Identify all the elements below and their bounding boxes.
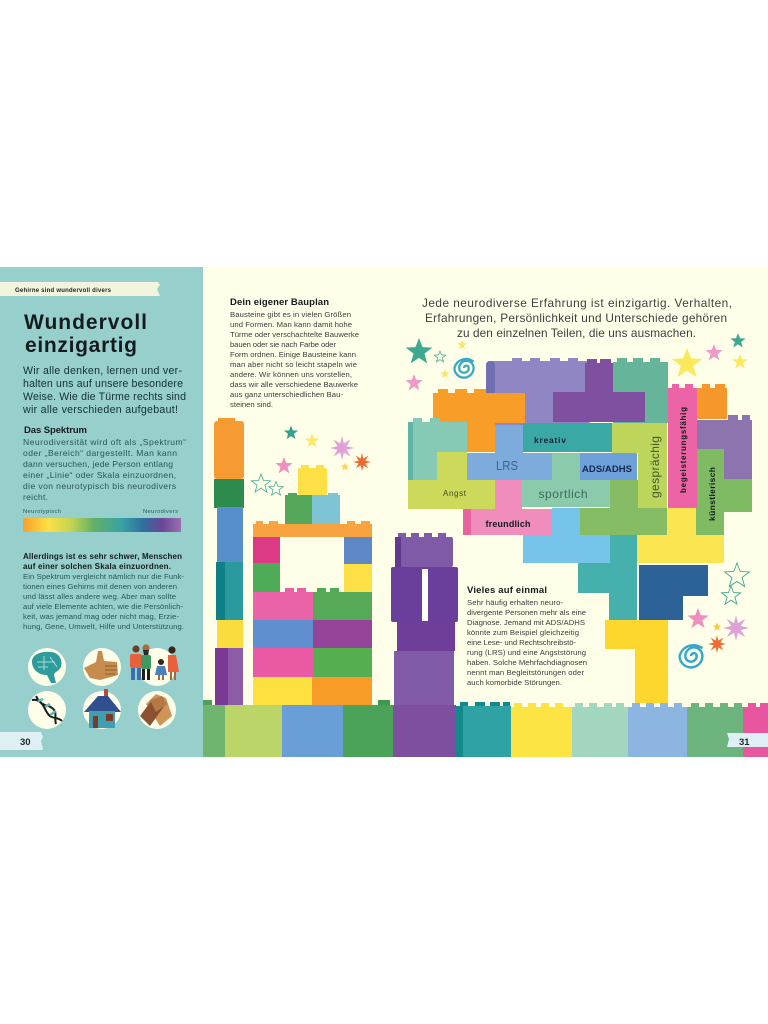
brick: navy — [639, 565, 708, 620]
title: Wundervoll — [24, 311, 147, 334]
spectrum text: einer „Linie“ oder Skala einzuordnen, — [23, 470, 176, 480]
heading: right page intro — [422, 296, 732, 340]
text block: Vieles auf einmal: Diagnose. Jemand mit ADS/ADHS — [467, 618, 585, 627]
text: Allerdings — [23, 552, 184, 631]
brick: orange right — [697, 384, 727, 419]
text block: Vieles auf einmal: könnte zum Beispiel gleichzeitig — [467, 628, 579, 637]
spectrum text: reicht. — [23, 492, 48, 502]
stars: above left tower — [252, 426, 371, 495]
spectrum text: die von neurotypisch bis neurodivers — [23, 481, 176, 491]
text block: Dein eigener Bauplan: Dein eigener Bauplan — [230, 297, 329, 308]
brick: lime Angst — [408, 452, 495, 509]
page background: right page — [203, 267, 768, 757]
panel: left teal sidebar — [0, 267, 203, 757]
label: gesprächig: gesprächig — [648, 436, 662, 498]
spectrum text — [23, 437, 186, 502]
text block: Dein eigener Bauplan: Bausteine gibt es in vielen Größen — [230, 310, 351, 319]
text block: Dein eigener Bauplan — [230, 297, 359, 409]
brick: yellow J — [605, 620, 668, 703]
brick: purple right — [697, 415, 752, 479]
intro text — [22, 365, 186, 416]
text: Allerdings: auf einer solchen Skala einzuordnen. — [23, 562, 171, 571]
label: Angst: Angst — [443, 489, 467, 498]
label: sportlich: sportlich — [538, 487, 588, 501]
text block: Dein eigener Bauplan: dass wir alle verschiedene Bauwerke — [230, 380, 358, 389]
text block: Dein eigener Bauplan: aus ganz unterschiedlichen Bau- — [230, 390, 343, 399]
label: begeisterungsfähig: begeisterungsfähig — [679, 407, 688, 493]
spectrum text: Neurodiversität wird oft als „Spektrum“ — [23, 437, 186, 447]
heading: Das Spektrum: Das Spektrum — [24, 425, 87, 436]
brick: teal T — [578, 535, 637, 620]
label: LRS: LRS — [496, 458, 518, 473]
text: Allerdings: hung, Gene, Umwelt, Hilfe und Unterstützung. — [23, 622, 184, 631]
spectrum text: dann versuchen, jede Person entlang — [23, 459, 173, 469]
text block: Vieles auf einmal: divergente Personen mehr als eine — [467, 608, 586, 617]
label: künstlerisch: künstlerisch — [707, 467, 717, 521]
label: kreativ: kreativ — [534, 435, 566, 445]
text block: Vieles auf einmal: Vieles auf einmal — [467, 585, 547, 596]
brick: lime gesprächig — [612, 423, 667, 508]
text block: Dein eigener Bauplan: Türme oder verschachtelte Bauwerke — [230, 330, 359, 339]
spectrum scale — [23, 509, 181, 532]
text block: Dein eigener Bauplan: und Formen. Man kann damit hohe — [230, 320, 352, 329]
text block: Dein eigener Bauplan: andere. Wir können uns vorstellen, — [230, 370, 352, 379]
text: Allerdings: tionen eines Gehirns mit denen von anderen — [23, 582, 177, 591]
brick: green middle — [580, 480, 667, 535]
spectrum scale: Neurodivers — [143, 509, 178, 515]
text block: Dein eigener Bauplan: man aber nicht so leicht stapeln wie — [230, 360, 357, 369]
text block: Vieles auf einmal: Sehr häufig erhalten neuro- — [467, 598, 563, 607]
text: Allerdings: auf viele Elemente achten, wie die Persönlich- — [23, 602, 183, 611]
text: Allerdings: keit, was jemand mag oder nicht mag, Erzie- — [23, 612, 179, 621]
brick: orange left — [433, 389, 525, 452]
heading: right page intro: Erfahrungen, Persönlichkeit und Unterschiede gehören — [425, 311, 727, 325]
icon: brain — [28, 648, 66, 686]
stars: upper left of brick cluster — [405, 338, 474, 390]
icon: clasped hands — [138, 691, 176, 729]
stars: upper right of brick cluster — [672, 333, 748, 377]
base row of bricks — [203, 700, 768, 757]
text block: Vieles auf einmal: auch komorbide Störungen. — [467, 678, 562, 687]
brick: purple T — [553, 359, 645, 422]
section tab — [0, 282, 160, 296]
spectrum scale: Neurotypisch — [23, 509, 61, 515]
intro text: Weise. Wie die Türme rechts sind — [23, 391, 186, 403]
intro text: halten uns auf unsere besondere — [23, 378, 183, 390]
icon: thumbs up — [83, 648, 121, 686]
page number 30: 30 — [20, 737, 31, 748]
brick: blue ADS/ADHS — [580, 453, 637, 480]
brick: sky blue — [523, 508, 610, 563]
text block: Vieles auf einmal: rung (LRS) und eine Angststörung — [467, 648, 586, 657]
intro text: wir alle verschieden aufgebaut! — [22, 404, 178, 416]
intro text: Wir alle denken, lernen und ver- — [23, 365, 182, 377]
brick: blue LRS — [467, 425, 552, 480]
section tab: Gehirne sind wundervoll divers — [15, 288, 112, 294]
text block: Vieles auf einmal: nennt man Begleitstörungen oder — [467, 668, 584, 677]
text block: Vieles auf einmal: eine Lese- und Rechtschreibstö- — [467, 638, 576, 647]
brick cluster — [408, 358, 752, 703]
stars: lower right — [680, 563, 749, 667]
purple brick tower — [391, 533, 458, 705]
text: Allerdings: Ein Spektrum vergleicht nämlich nur die Funk- — [23, 572, 184, 581]
text: Allerdings: und lässt alles andere weg. Aber man sollte — [23, 592, 176, 601]
spectrum text: oder „Bereich“ dargestellt. Man kann — [23, 448, 177, 458]
brick: lavender — [486, 358, 590, 425]
page number 31 — [727, 733, 768, 748]
heading: right page intro: Jede neurodiverse Erfahrung ist einzigartig. Verhalten, — [422, 296, 732, 310]
brick: teal green back — [613, 358, 668, 423]
title: einzigartig — [25, 334, 137, 357]
icon: house — [83, 689, 121, 729]
label: freundlich: freundlich — [486, 519, 530, 529]
text block: Dein eigener Bauplan: bauen oder sie nach Farbe oder — [230, 340, 336, 349]
page number 30 — [0, 732, 43, 750]
brick: green right — [696, 449, 752, 535]
title — [24, 311, 147, 357]
text: Allerdings: Allerdings ist es sehr schwer, Menschen — [23, 552, 182, 561]
icon: DNA — [28, 691, 66, 729]
text block: Dein eigener Bauplan: steinen sind. — [230, 400, 273, 409]
brick: teal kreativ — [523, 423, 612, 452]
text block: Dein eigener Bauplan: Form ordnen. Einige Bausteine kann — [230, 350, 356, 359]
brick: mint sportlich — [522, 453, 610, 507]
text block: Vieles auf einmal — [467, 585, 587, 687]
icon: family — [130, 644, 179, 686]
brick frame structure — [253, 465, 372, 705]
brick: light teal — [408, 418, 467, 480]
brick: pink begeisterungsfähig — [668, 384, 697, 508]
brick: pink freundlich — [463, 480, 552, 535]
page number 31: 31 — [739, 737, 750, 748]
text block: Vieles auf einmal: haben. Solche Mehrfachdiagnosen — [467, 658, 587, 667]
label: ADS/ADHS: ADS/ADHS — [582, 464, 632, 475]
tall brick tower — [214, 418, 244, 707]
heading: right page intro: zu den einzelnen Teilen, die uns ausmachen. — [457, 326, 696, 340]
brick: yellow wide — [637, 508, 724, 563]
